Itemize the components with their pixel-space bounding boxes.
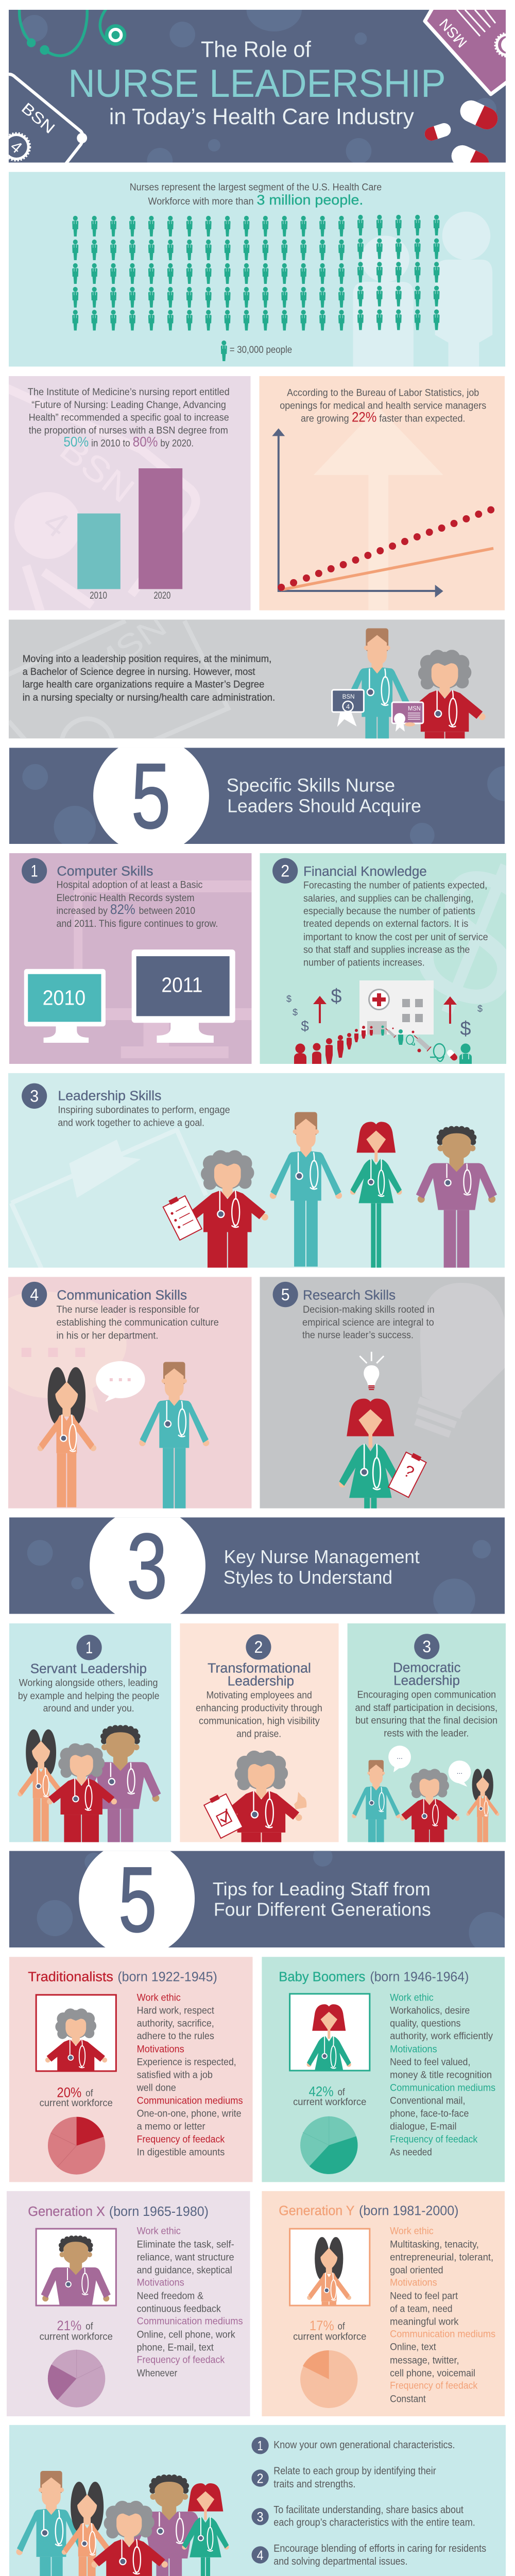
characteristics: Whenever <box>137 2367 178 2379</box>
icon: pills <box>424 98 497 163</box>
panel: BSN goal <box>5 376 251 613</box>
badge 4 <box>22 1282 47 1307</box>
tip 4 <box>252 2543 486 2567</box>
bar chart <box>77 468 182 601</box>
heading: Generation Y <box>279 2204 354 2218</box>
panel: financial knowledge <box>260 817 515 1064</box>
characteristics: satisfied with a job <box>137 2069 213 2080</box>
panel: democratic leadership <box>348 1623 506 1863</box>
portrait <box>36 2229 116 2358</box>
workforce share: current workforce <box>40 2097 113 2109</box>
body text: and praise. <box>236 1728 281 1740</box>
job growth text <box>280 387 486 425</box>
body text: establishing the communication culture <box>56 1317 219 1328</box>
characteristics: Communication mediums <box>390 2082 495 2094</box>
workforce statement: 3 million people. <box>256 192 363 208</box>
body text <box>56 1304 219 1342</box>
body text <box>303 880 488 968</box>
section title: Specific Skills Nurse <box>227 775 395 796</box>
section title: Key Nurse Management <box>224 1547 420 1567</box>
body text: communication, high visibility <box>199 1715 320 1727</box>
nurse with clipboard <box>339 1399 427 1578</box>
job growth text: 22% <box>352 409 376 425</box>
badge 3 <box>414 1634 439 1659</box>
red arrows <box>313 996 457 1024</box>
characteristics: reliance, want structure <box>137 2251 234 2263</box>
characteristics: Work ethic <box>137 1992 181 2003</box>
bar chart: 2010 <box>90 590 107 601</box>
body text: salaries, and supplies can be challenging, <box>303 893 473 904</box>
characteristics: phone, E-mail, text <box>137 2342 214 2353</box>
line chart <box>272 428 494 598</box>
body text: increased by <box>56 905 108 917</box>
badge 2: 2 <box>254 1638 263 1656</box>
heading: Financial Knowledge <box>303 865 427 879</box>
dollar signs: $ <box>286 994 291 1004</box>
characteristics <box>137 2226 243 2379</box>
panel: generation X <box>7 2191 250 2416</box>
badge 2: 2 <box>281 861 289 880</box>
body text: Hospital adoption of at least a Basic <box>56 879 203 891</box>
job growth text: According to the Bureau of Labor Statistics, job <box>287 387 479 398</box>
speech bubble <box>96 1361 145 1402</box>
panel: job growth <box>259 376 505 613</box>
degree text: large health care organizations require a Master’s Degree <box>23 679 264 690</box>
icon: MSN certificate <box>423 10 506 96</box>
heading: Leadership Skills <box>58 1089 161 1104</box>
BSN goal text: “Future of Nursing: Leading Change, Advancing <box>31 399 226 411</box>
body text: and 2011. This figure continues to grow. <box>56 918 218 929</box>
characteristics: Work ethic <box>390 1992 434 2003</box>
characteristics: well done <box>136 2082 176 2094</box>
degree text: in a nursing specialty or nursing/health care administration. <box>23 692 275 703</box>
icon: BSN certificate: BSN <box>18 99 58 137</box>
panel: degree requirements <box>9 619 505 739</box>
pie chart 42% <box>300 2116 358 2174</box>
section header: 3 styles <box>9 1507 505 1624</box>
portrait <box>36 1995 116 2099</box>
characteristics: Need to feel valued, <box>390 2057 470 2068</box>
characteristics: cell phone, voicemail <box>390 2367 475 2379</box>
team of five nurses <box>16 2471 229 2576</box>
characteristics: Frequency of feedack <box>390 2133 478 2145</box>
monitor 2011 <box>132 950 235 1043</box>
characteristics: Conventional mail, <box>390 2095 465 2107</box>
characteristics: continuous feedback <box>137 2303 221 2314</box>
monitor 2010: 2010 <box>43 986 85 1009</box>
job growth text: faster than expected. <box>379 413 465 425</box>
section title: Leaders Should Acquire <box>227 795 421 816</box>
heading <box>28 2205 209 2219</box>
body text: enhancing productivity through <box>196 1703 322 1714</box>
section title <box>224 1547 420 1588</box>
workforce statement: Nurses represent the largest segment of the U.S. Health Care <box>130 182 382 193</box>
nurse figures with degrees <box>331 629 486 739</box>
nurse group <box>352 1760 500 1863</box>
section title: Four Different Generations <box>214 1899 431 1920</box>
body text: and work together to achieve a goal. <box>58 1117 204 1128</box>
characteristics: Need freedom & <box>137 2290 203 2301</box>
characteristics <box>136 1992 243 2158</box>
icon: MSN certificate: MSN <box>436 15 470 51</box>
body text: Forecasting the number of patients expected, <box>303 880 487 891</box>
dollar signs: $ <box>293 1007 298 1018</box>
characteristics: dialogue, E-mail <box>390 2121 456 2132</box>
characteristics: authority, work efficiently <box>390 2030 493 2042</box>
BSN goal text: the proportion of nurses with a BSN degree from <box>29 425 228 436</box>
characteristics: Frequency of feedack <box>390 2380 478 2392</box>
badge 5: 5 <box>281 1285 290 1304</box>
pictogram grid <box>72 215 440 331</box>
panel: baby boomers <box>262 1957 505 2182</box>
body text: but ensuring that the final decision <box>355 1715 497 1726</box>
body text <box>302 1304 435 1341</box>
degree text: Moving into a leadership position requires, at the minimum, <box>23 653 271 665</box>
body text: empirical science are integral to <box>302 1317 434 1328</box>
dollar signs: $ <box>301 1018 309 1034</box>
panel: nurses workforce <box>9 172 505 368</box>
nurse with clipboard and thumbs up <box>203 1751 306 1869</box>
workforce statement <box>130 182 382 208</box>
characteristics: Hard work, respect <box>137 2005 214 2016</box>
heading: (born 1965-1980) <box>109 2205 209 2219</box>
characteristics: Need to feel part <box>390 2290 458 2301</box>
panel: leadership skills <box>8 1073 505 1270</box>
big number 5: 5 <box>131 744 170 848</box>
nurse with clipboard: ? <box>401 1461 417 1482</box>
workforce share <box>40 2318 113 2343</box>
portrait <box>290 2229 370 2342</box>
body text: especially because the number of patients <box>303 906 475 917</box>
body text: Decision-making skills rooted in <box>303 1304 435 1315</box>
characteristics <box>390 2226 495 2404</box>
characteristics: Online, cell phone, work <box>137 2329 235 2340</box>
icon: BSN certificate: 4 <box>7 137 26 157</box>
characteristics: Experience is respected, <box>137 2057 236 2068</box>
silhouette people <box>353 212 492 368</box>
BSN goal text: 50% <box>63 434 89 449</box>
characteristics: and guidance, skeptical <box>137 2264 232 2276</box>
characteristics: Communication mediums <box>137 2095 243 2107</box>
panel: communication skills <box>8 1277 252 1512</box>
characteristics: message, twitter, <box>390 2354 459 2366</box>
team of nurses <box>162 1112 497 1268</box>
workforce share: of <box>85 2320 93 2332</box>
body text: and staff participation in decisions, <box>355 1702 497 1714</box>
characteristics: Eliminate the task, self- <box>137 2239 234 2250</box>
body text: by example and helping the people <box>18 1690 159 1702</box>
BSN goal text <box>28 386 230 449</box>
heading: Research Skills <box>303 1289 396 1303</box>
nurse group <box>18 1725 161 1867</box>
badge 1: 1 <box>85 1638 93 1657</box>
legend: = 30,000 people <box>230 344 292 355</box>
characteristics: Frequency of feedack <box>137 2133 225 2145</box>
heading: Computer Skills <box>57 865 153 879</box>
characteristics: Work ethic <box>390 2226 434 2237</box>
tip 3 <box>252 2504 475 2529</box>
dollar signs: $ <box>477 1004 483 1014</box>
body text: around and under you. <box>43 1703 134 1714</box>
nurse figures with degrees: MSN <box>408 705 421 712</box>
tip 4: and solving departmental issues. <box>273 2556 407 2567</box>
job growth text: openings for medical and health service managers <box>280 400 486 412</box>
panel: transformational leadership <box>180 1623 339 1869</box>
characteristics <box>390 1992 495 2158</box>
characteristics: Communication mediums <box>390 2329 495 2340</box>
workforce share: 21% <box>57 2318 81 2333</box>
icon: stethoscope <box>20 8 126 56</box>
characteristics: quality, questions <box>390 2018 461 2029</box>
panel: five tips <box>9 2425 506 2576</box>
characteristics: Motivations <box>390 2277 437 2289</box>
body text: Motivating employees and <box>206 1689 312 1701</box>
workforce share: 42% <box>309 2083 334 2099</box>
panel: degree requirements: MSN <box>83 608 173 686</box>
section title: Styles to Understand <box>224 1567 392 1588</box>
panel: BSN goal: BSN <box>53 428 142 511</box>
heading: (born 1981-2000) <box>359 2204 458 2218</box>
heading: Transformational <box>208 1661 311 1675</box>
staff and supplies <box>381 1025 472 1064</box>
characteristics: adhere to the rules <box>137 2030 214 2042</box>
characteristics: meaningful work <box>390 2316 459 2327</box>
monitor 2010 <box>24 969 106 1043</box>
legend <box>221 341 292 361</box>
workforce share <box>293 2083 366 2108</box>
tip 3: To facilitate understanding, share basics about <box>273 2504 464 2516</box>
job growth text: are growing <box>301 413 349 425</box>
panel: research skills <box>260 1277 507 1578</box>
heading: (born 1946-1964) <box>370 1970 469 1985</box>
body text: between 2010 <box>139 905 195 917</box>
BSN goal text: Health” recommended a specific goal to increase <box>29 412 229 423</box>
workforce share: 17% <box>310 2318 334 2333</box>
tip 1 <box>252 2437 455 2454</box>
characteristics: One-on-one, phone, write <box>137 2108 242 2120</box>
badge 5 <box>273 1282 298 1307</box>
header banner <box>8 10 506 163</box>
body text: so that staff and supplies increase as the <box>303 944 470 956</box>
body text: number of patients increases. <box>303 957 425 968</box>
section title <box>227 775 421 816</box>
heading <box>279 2204 458 2218</box>
characteristics: phone, face-to-face <box>390 2108 469 2120</box>
portrait <box>290 1994 370 2130</box>
BSN goal text: in 2010 to <box>91 437 130 449</box>
badge 2 <box>246 1634 271 1660</box>
dollar signs: $ <box>460 1018 471 1040</box>
BSN goal text: by 2020. <box>160 437 194 449</box>
tip 1: Know your own generational characteristics. <box>273 2439 455 2451</box>
section title <box>213 1879 431 1920</box>
workforce share: current workforce <box>40 2331 113 2343</box>
tip 1: 1 <box>258 2439 263 2453</box>
characteristics: Constant <box>390 2393 426 2404</box>
body text: Working alongside others, leading <box>19 1677 158 1689</box>
characteristics: Motivations <box>137 2277 184 2289</box>
panel: traditionalists <box>9 1957 252 2182</box>
heading <box>279 1970 469 1985</box>
degree text: a Bachelor of Science degree in nursing. However, most <box>23 666 255 677</box>
monitor 2011: 2011 <box>161 973 202 997</box>
hospital scene <box>286 980 483 1064</box>
nurse figures with degrees: 4 <box>346 703 350 710</box>
characteristics: Online, text <box>390 2342 436 2353</box>
title line 2: NURSE LEADERSHIP <box>68 62 446 106</box>
characteristics: Motivations <box>137 2043 184 2055</box>
BSN goal text: 80% <box>133 434 158 449</box>
section title: Tips for Leading Staff from <box>213 1879 431 1900</box>
heading <box>208 1661 311 1689</box>
body text: The nurse leader is responsible for <box>56 1304 200 1315</box>
background arrow <box>314 407 443 613</box>
tip 2 <box>252 2466 436 2490</box>
panel: BSN goal: 4 <box>36 501 76 546</box>
speech bubbles: ... <box>457 1767 462 1775</box>
title line 3: in Today’s Health Care Industry <box>109 104 414 129</box>
badge 1 <box>22 858 47 884</box>
characteristics: of a team, need <box>390 2303 453 2314</box>
speech bubbles <box>388 1745 471 1787</box>
panel: servant leadership <box>9 1623 171 1867</box>
dollar signs: $ <box>331 986 342 1007</box>
badge 3 <box>22 1083 47 1109</box>
heading <box>393 1660 460 1688</box>
big number 5: 5 <box>118 1848 157 1952</box>
tip 3: each group’s characteristics with the entire team. <box>273 2517 475 2529</box>
badge 2 <box>272 858 298 884</box>
body text: treated depends on external factors. It is <box>303 918 469 929</box>
body text <box>58 1104 230 1128</box>
characteristics: entrepreneurial, tolerant, <box>390 2251 493 2263</box>
characteristics: Workaholics, desire <box>390 2005 470 2016</box>
icon: light bulb <box>359 1352 384 1389</box>
characteristics: Multitasking, tenacity, <box>390 2239 479 2250</box>
heading: Democratic <box>393 1660 460 1675</box>
workforce share: current workforce <box>293 2331 366 2343</box>
big number 3: 3 <box>127 1514 167 1618</box>
body text <box>355 1689 497 1739</box>
pie chart 20% <box>48 2117 105 2175</box>
characteristics: In digestible amounts <box>137 2146 225 2158</box>
workforce share: current workforce <box>293 2096 366 2108</box>
body text: in his or her department. <box>56 1330 158 1342</box>
heading: Baby Boomers <box>279 1970 365 1985</box>
pie chart 21% <box>48 2350 105 2408</box>
badge 3: 3 <box>422 1637 431 1656</box>
workforce share <box>293 2318 366 2343</box>
pie chart 17% <box>300 2350 357 2408</box>
body text: the nurse leader’s success. <box>302 1330 414 1341</box>
title line 1: The Role of <box>201 37 312 62</box>
nurse figures with degrees: BSN <box>342 693 354 700</box>
body text <box>56 879 218 929</box>
nurses talking <box>38 1362 209 1512</box>
characteristics: As needed <box>390 2146 432 2158</box>
tip 2: traits and strengths. <box>273 2479 355 2490</box>
tip 2: Relate to each group by identifying their <box>273 2466 436 2477</box>
heading <box>28 1970 217 1985</box>
workforce share: 20% <box>57 2085 81 2100</box>
badge 4: 4 <box>30 1285 39 1304</box>
workforce share <box>40 2085 113 2109</box>
badge 1 <box>77 1635 102 1660</box>
workforce share: of <box>85 2088 93 2099</box>
body text: Inspiring subordinates to perform, engage <box>58 1104 230 1116</box>
section header: 5 skills <box>9 748 505 844</box>
tip 3: 3 <box>257 2510 264 2524</box>
body text <box>18 1677 159 1714</box>
panel: computer skills <box>9 853 252 1064</box>
badge 1: 1 <box>31 861 38 880</box>
heading: (born 1922-1945) <box>117 1970 217 1985</box>
characteristics: Communication mediums <box>137 2316 243 2327</box>
workforce share: of <box>338 2320 345 2332</box>
workforce share: of <box>338 2087 345 2098</box>
degree text <box>23 653 275 703</box>
body text <box>196 1689 322 1740</box>
tip 4: Encourage blending of efforts in caring for residents <box>273 2543 486 2554</box>
tip 4: 4 <box>257 2548 264 2563</box>
body text: important to know the cost per unit of service <box>303 931 488 943</box>
bar chart: 2020 <box>153 590 170 601</box>
body text: Encouraging open communication <box>357 1689 496 1701</box>
speech bubbles: ... <box>397 1752 403 1760</box>
workforce statement: Workforce with more than <box>148 196 253 207</box>
heading: Traditionalists <box>28 1970 113 1985</box>
characteristics: Frequency of feedack <box>137 2354 225 2366</box>
dollar signs <box>286 986 483 1040</box>
heading: Generation X <box>28 2205 105 2219</box>
characteristics: money & title recognition <box>390 2069 492 2080</box>
BSN goal text: The Institute of Medicine’s nursing report entitled <box>28 386 230 398</box>
section header: 5 tips <box>9 1840 510 1957</box>
characteristics: a memo or letter <box>137 2121 205 2132</box>
queue of patients <box>294 1026 373 1064</box>
characteristics: authority, sacrifice, <box>137 2018 214 2029</box>
characteristics: goal oriented <box>390 2264 443 2276</box>
heading: Leadership <box>228 1674 294 1689</box>
body text: rests with the leader. <box>384 1727 469 1739</box>
badge 3: 3 <box>30 1087 39 1106</box>
characteristics: Work ethic <box>137 2226 181 2237</box>
heading: Leadership <box>393 1673 460 1688</box>
icon: BSN certificate <box>8 73 88 163</box>
heading: Communication Skills <box>57 1289 187 1303</box>
panel: generation Y <box>262 2191 505 2416</box>
heading: Servant Leadership <box>30 1662 147 1676</box>
tip 2: 2 <box>257 2471 264 2486</box>
body text: Electronic Health Records system <box>56 892 195 904</box>
body text: 82% <box>110 902 135 917</box>
characteristics: Motivations <box>390 2043 437 2055</box>
